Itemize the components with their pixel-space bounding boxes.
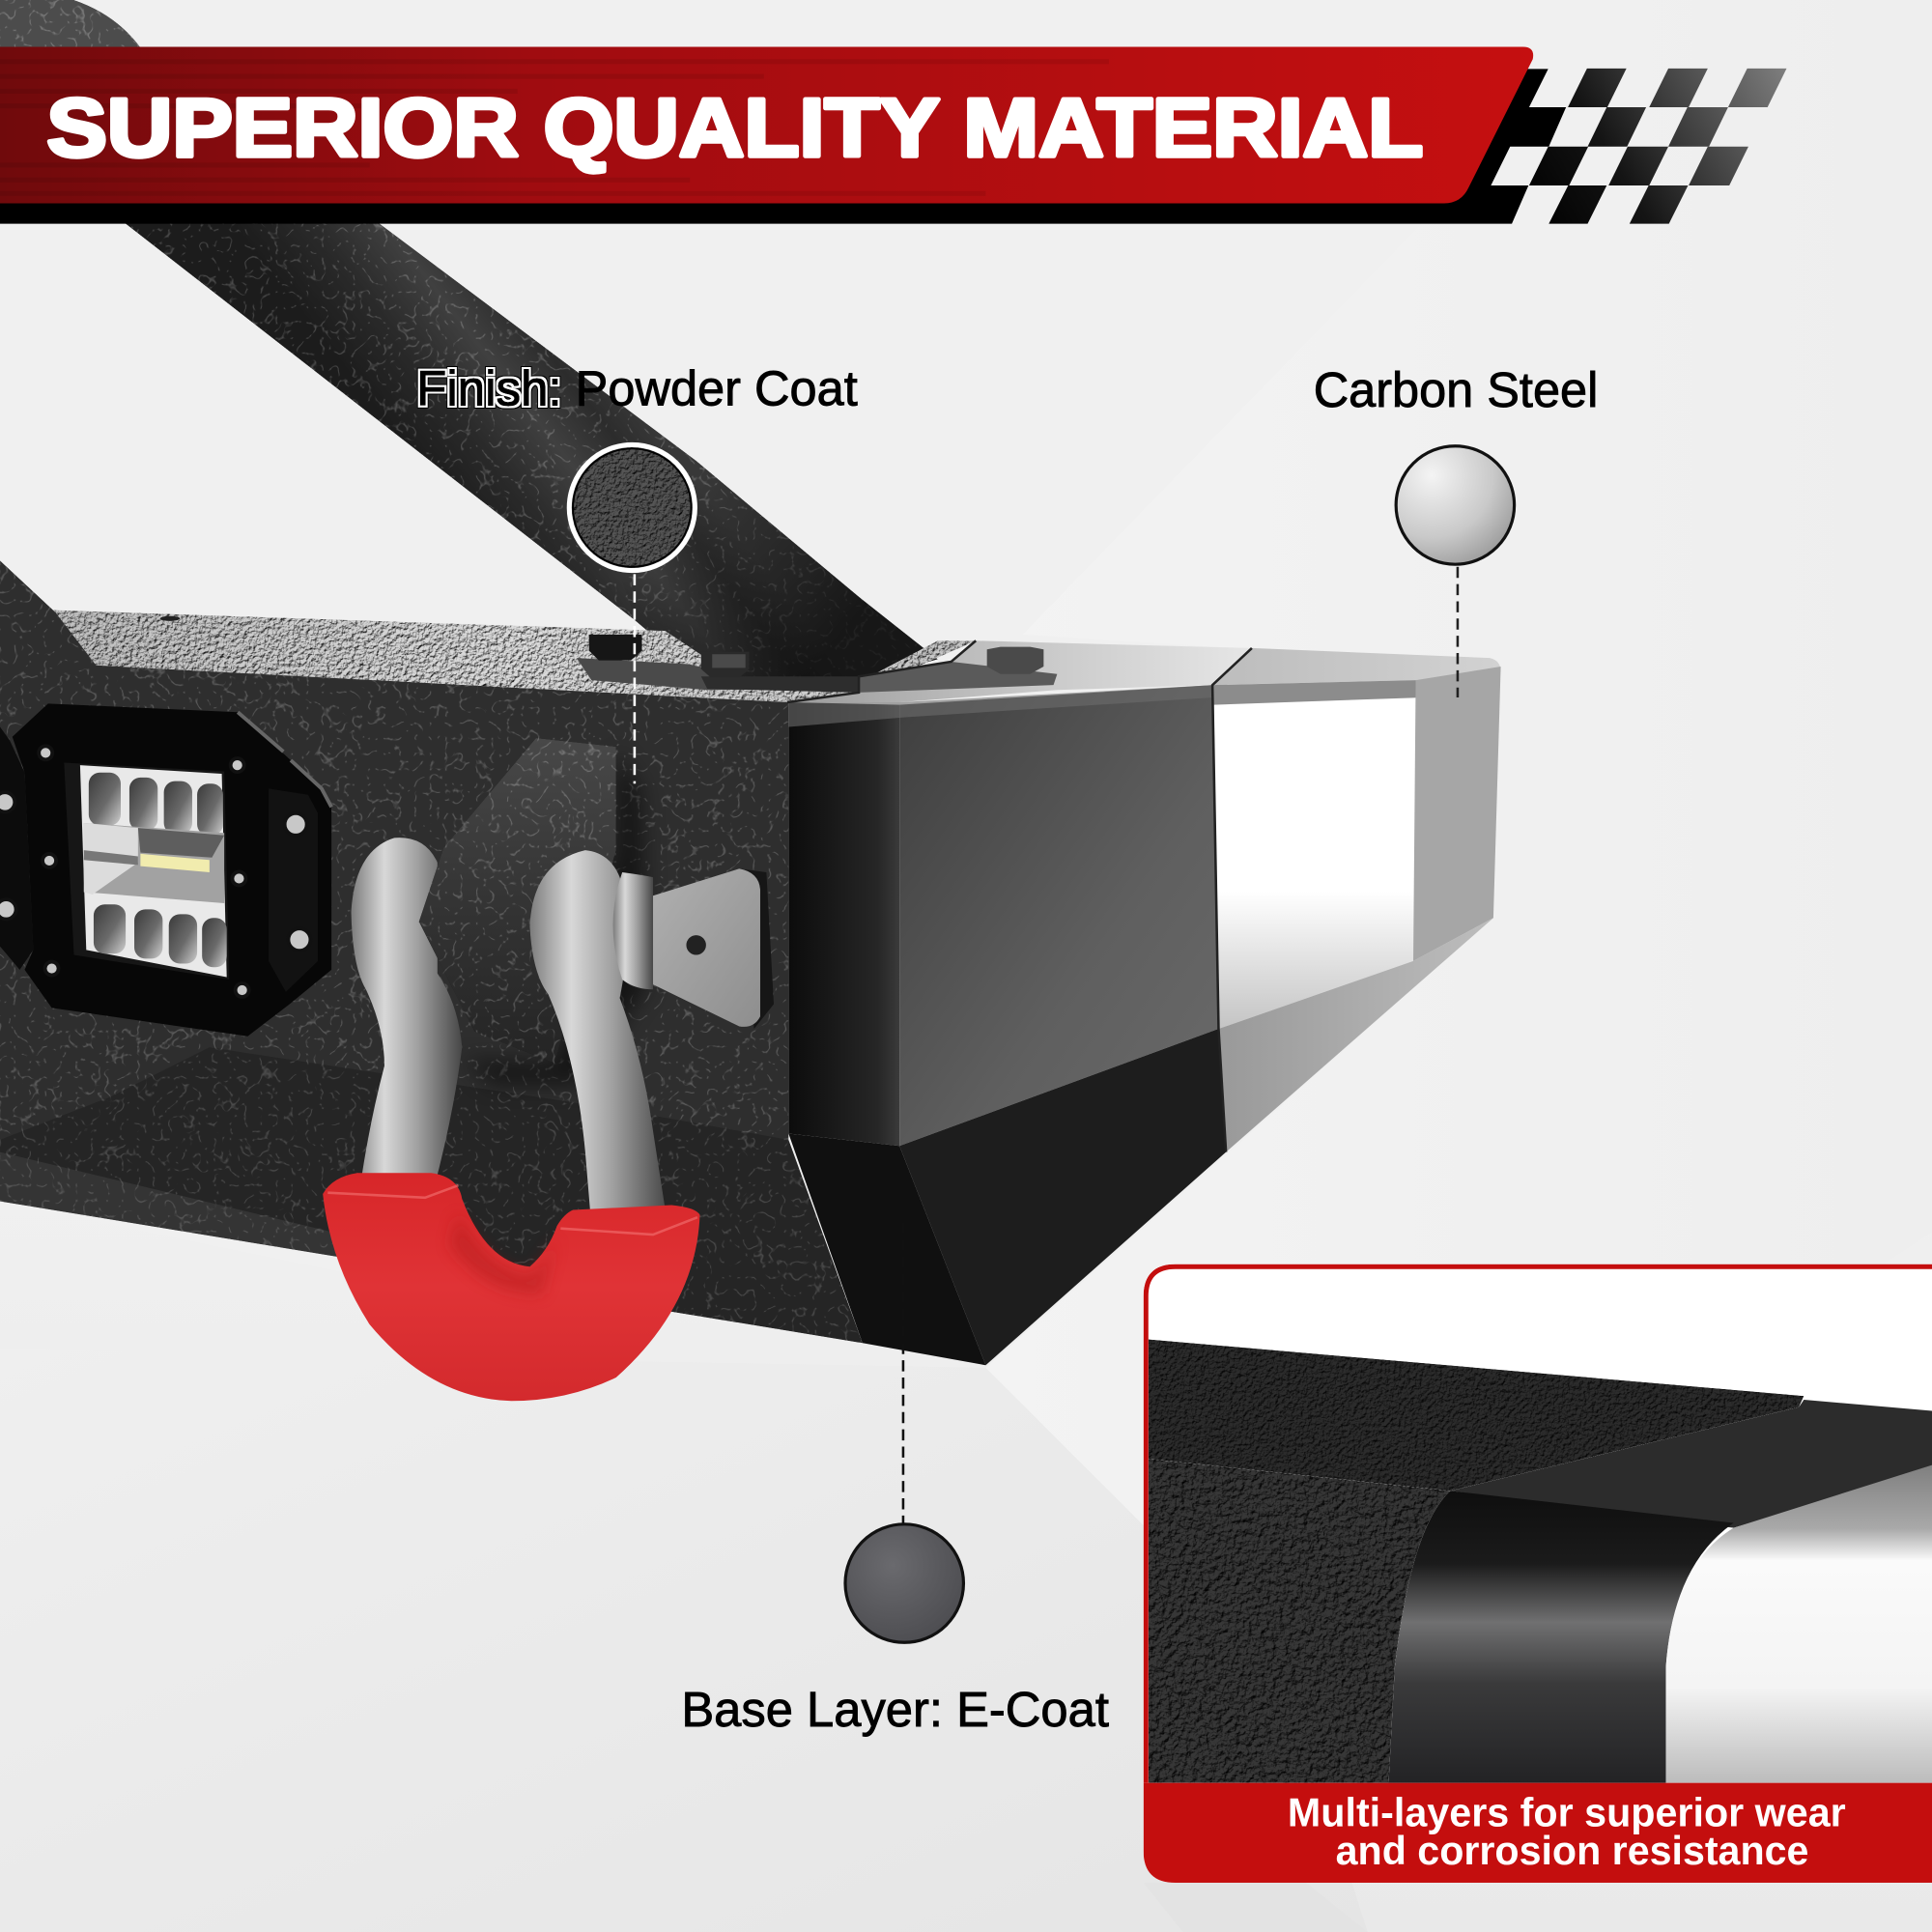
- left neighbouring plate: [0, 727, 33, 970]
- middle bolt: [701, 652, 750, 678]
- top surface hole: [160, 616, 180, 621]
- mounting plate and bolts: [577, 635, 859, 693]
- caption line 1: Multi-layers for superior wear: [1288, 1789, 1846, 1834]
- callout: carbon steel: [1314, 362, 1598, 697]
- swatch inner outline: [573, 448, 692, 567]
- label: Carbon Steel: [1314, 362, 1598, 417]
- carbon steel face: [1213, 685, 1424, 1029]
- red ribbon: [0, 46, 1533, 203]
- white backdrop: [1148, 1269, 1932, 1781]
- label: Base Layer: E-Coat: [681, 1682, 1109, 1737]
- red border: [1146, 1266, 1932, 1783]
- pin hole: [686, 935, 706, 955]
- upper crossbar tube: [0, 0, 938, 680]
- sleeve inner shading: [450, 1213, 557, 1293]
- e-coat lower left face: [788, 1133, 985, 1365]
- e-coat bevel highlight: [788, 685, 1213, 727]
- textured front face: [0, 560, 863, 1343]
- dashed leader: [634, 574, 636, 783]
- e-coat top: [1450, 1400, 1932, 1528]
- e-coat top: [787, 640, 1252, 702]
- front plate: [701, 676, 859, 693]
- carbon steel: [1665, 1465, 1932, 1783]
- callout: powder coat: [416, 361, 858, 783]
- swatch: [1396, 446, 1515, 564]
- inset panel: layer close-up: [1144, 1264, 1932, 1883]
- label: finish: Finish:: [416, 361, 562, 416]
- tube body: [124, 222, 938, 680]
- left shackle arm: [352, 838, 462, 1189]
- lower lit strip: [0, 1152, 357, 1275]
- e-coat raised plate: [859, 662, 1057, 693]
- right bolt: [987, 647, 1043, 674]
- silver top: [1211, 648, 1501, 685]
- swatch: [571, 446, 694, 569]
- sleeve lip highlight: [327, 1185, 697, 1235]
- LED light: [0, 703, 331, 1037]
- powder coat front: [1149, 1459, 1450, 1783]
- light plate: [13, 703, 331, 1037]
- LED strip: [140, 854, 210, 872]
- ribbon stripes: [0, 59, 1109, 196]
- chamfer highlight: [238, 712, 331, 807]
- lower textured facet: [0, 1047, 863, 1343]
- mounting tab: [419, 738, 616, 1064]
- checkered flag: [1529, 69, 1786, 224]
- swatch: [845, 1524, 963, 1642]
- pin tab: [653, 868, 760, 1027]
- title banner: [0, 46, 1786, 224]
- center bracket: [84, 850, 138, 865]
- left plate: [577, 658, 788, 690]
- carbon steel right face: [1413, 667, 1501, 961]
- e-coat lower face: [899, 1029, 1226, 1365]
- dashed leader: [902, 1222, 904, 1525]
- pin backing: [739, 868, 774, 1029]
- mount shadow: [462, 752, 647, 1084]
- center dark reflector: [138, 828, 224, 858]
- red rubber sleeve: [323, 1173, 699, 1401]
- middle bolt face: [712, 654, 746, 668]
- black underlay: [0, 69, 1566, 224]
- reflector rows: [89, 773, 227, 967]
- powder coat top: [1149, 1339, 1804, 1491]
- screws: [0, 746, 310, 997]
- e-coat main face: [899, 685, 1218, 1146]
- caption line 2: and corrosion resistance: [1336, 1828, 1808, 1873]
- textured top surface: [49, 610, 976, 702]
- tube above banner: [0, 0, 142, 49]
- right side plate: [269, 788, 318, 992]
- tube base shadow: [579, 456, 938, 680]
- right shackle arm: [529, 850, 668, 1226]
- window recess: [64, 763, 229, 980]
- window: [80, 765, 227, 977]
- left bolt: [589, 635, 642, 661]
- label: powder coat: Powder Coat: [576, 361, 858, 416]
- bumper body: [0, 560, 1501, 1365]
- D-ring shackle: [323, 738, 774, 1401]
- shackle pin: [613, 872, 653, 989]
- title: SUPERIOR QUALITY MATERIAL: [46, 82, 1423, 174]
- e-coat left face: [788, 702, 899, 1146]
- carbon steel bevel: [1212, 680, 1424, 705]
- center section: [84, 823, 224, 903]
- carbon steel lower face: [1218, 918, 1493, 1152]
- dashed leader: [1457, 567, 1459, 697]
- swatch ring: [569, 444, 695, 571]
- callout: e-coat: [681, 1222, 1109, 1737]
- caption band: [1144, 1783, 1932, 1883]
- heat-sink fins: [84, 823, 138, 895]
- e-coat front: [1389, 1491, 1734, 1783]
- layer edge lines: [787, 640, 1252, 1152]
